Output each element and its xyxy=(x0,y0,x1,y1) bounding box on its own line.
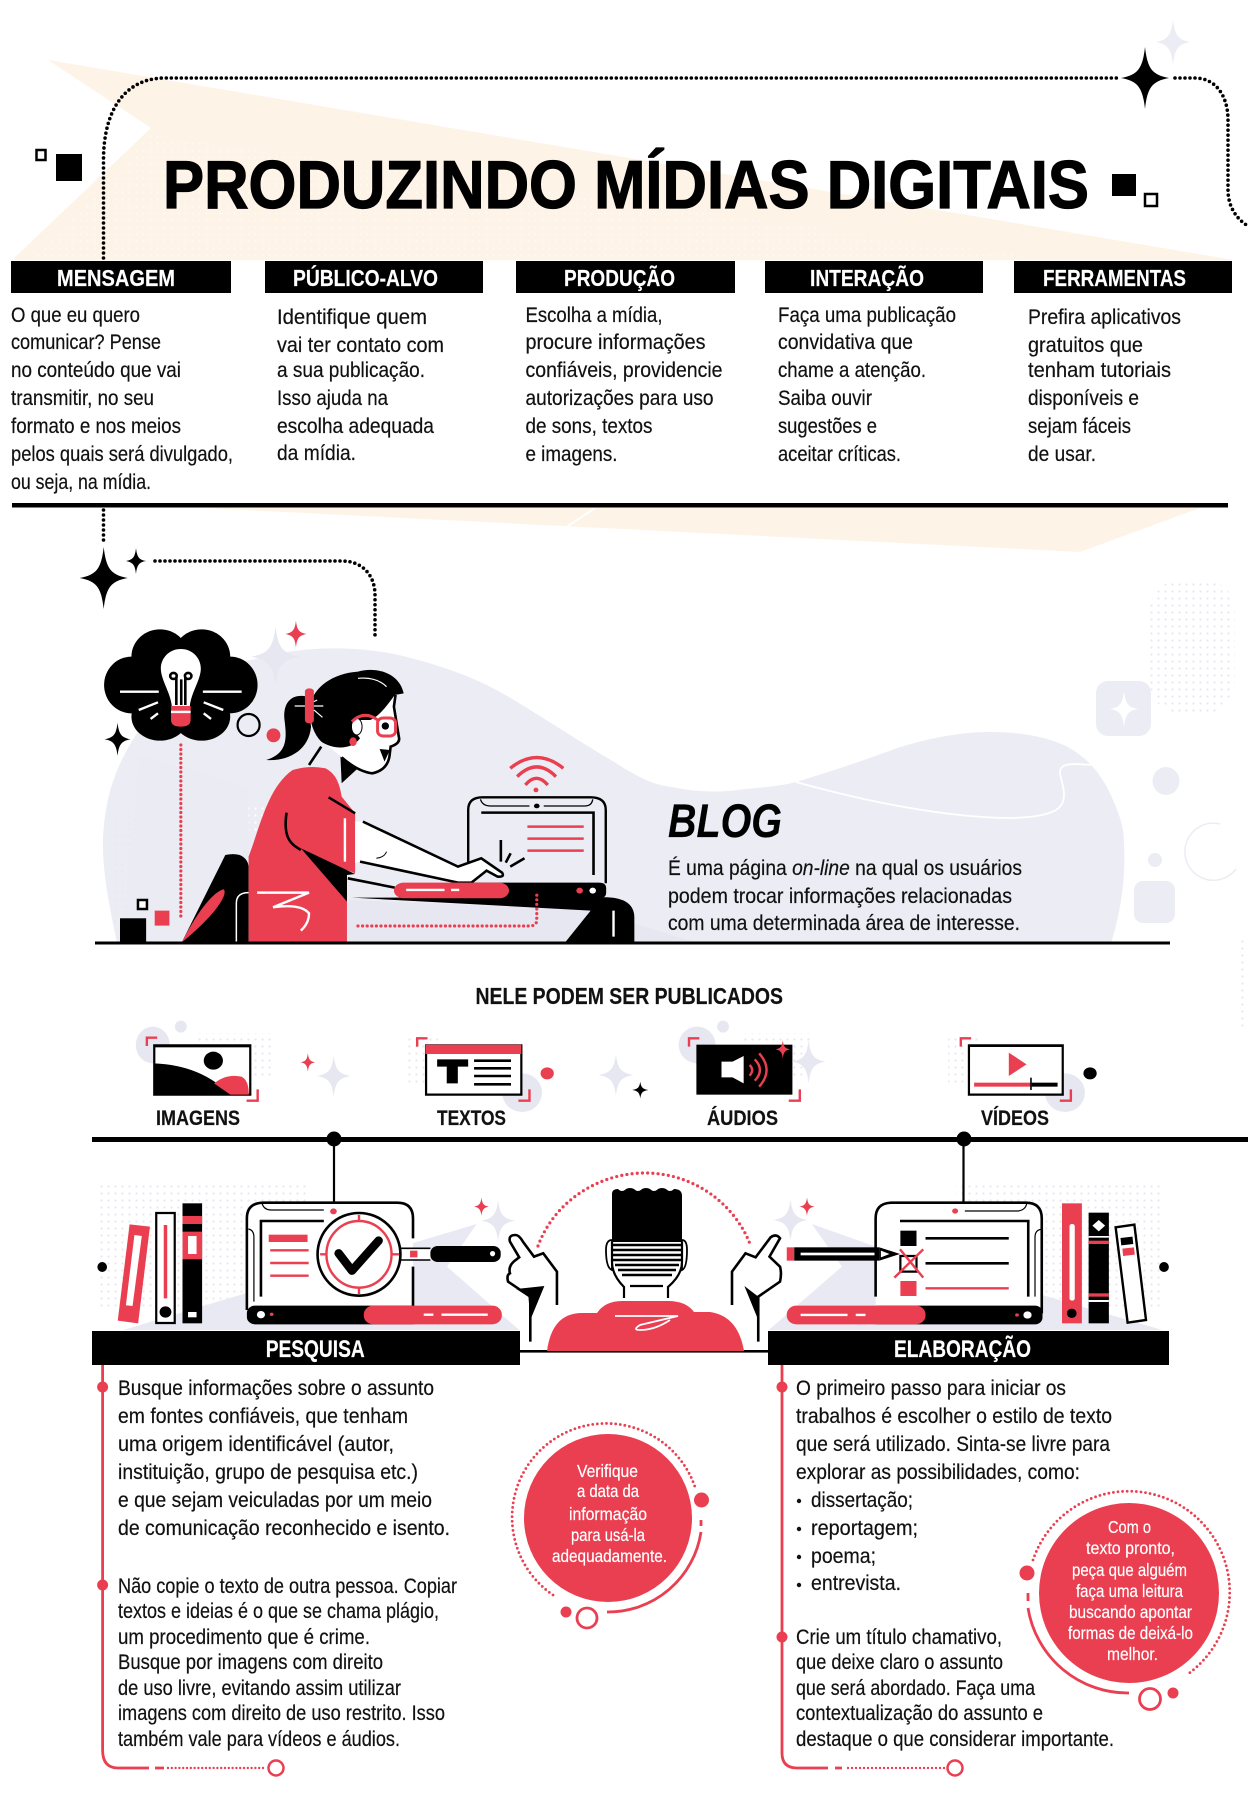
text block: elaboração paragraph 2: contextualização do assunto e xyxy=(796,1701,1043,1725)
illustration: central person xyxy=(520,1188,768,1353)
media labels: TEXTOS xyxy=(437,1107,506,1130)
text block: elaboração paragraph 1: entrevista. xyxy=(811,1571,901,1595)
panel: interação: Saiba ouvir xyxy=(778,386,872,410)
icon: áudios xyxy=(679,1021,826,1101)
callout: verifique: informação xyxy=(569,1504,647,1524)
panel: público-alvo: da mídia. xyxy=(277,441,356,465)
callout: verifique: para usá-la xyxy=(571,1525,645,1545)
heading: nele podem ser publicados: NELE PODEM SER PUBLICADOS xyxy=(476,983,783,1009)
panel: ferramentas: sejam fáceis xyxy=(1028,414,1131,438)
illustration: pesquisa xyxy=(97,1197,557,1342)
blog heading: BLOG xyxy=(668,794,782,847)
dotted connector to blog xyxy=(104,510,375,637)
callout: com o texto pronto xyxy=(1020,1491,1230,1710)
media labels: IMAGENS xyxy=(156,1107,240,1130)
panel: elaboração header xyxy=(768,1331,1169,1365)
panel: mensagem: pelos quais será divulgado, xyxy=(11,442,233,466)
text block: elaboração paragraph 1: poema; xyxy=(811,1544,876,1568)
text block: pesquisa paragraph 2: textos e ideias é o que se chama plágio, xyxy=(118,1599,439,1623)
icon: stars xyxy=(474,1197,515,1241)
text block: pesquisa paragraph 1: e que sejam veiculadas por um meio xyxy=(118,1488,432,1512)
illustration: woman at laptop xyxy=(104,621,697,943)
dot textures behind icons xyxy=(97,1033,1164,1310)
icon: right squares xyxy=(1112,174,1157,206)
panel: ferramentas: disponíveis e xyxy=(1028,386,1139,410)
text block: elaboração paragraph 2: que será abordado. Faça uma xyxy=(796,1676,1035,1700)
icon: stars xyxy=(301,1053,351,1097)
header background shapes xyxy=(12,60,1234,552)
icon: vídeos xyxy=(961,1038,1097,1112)
icon: star near cloud xyxy=(104,723,131,756)
text block: pesquisa paragraph 2: também vale para vídeos e áudios. xyxy=(118,1727,400,1751)
table and laptop xyxy=(352,797,634,943)
callout: com o texto pronto: melhor. xyxy=(1107,1644,1158,1664)
thought bubbles xyxy=(238,714,280,742)
text block: pesquisa paragraph 2: de uso livre, evitando assim utilizar xyxy=(118,1676,401,1700)
timeline line xyxy=(92,1132,1248,1202)
red dotted arc over head xyxy=(538,1173,750,1246)
icon: thought cloud with bulb xyxy=(104,629,258,741)
icon: books xyxy=(118,1203,202,1323)
text block: elaboração paragraph 1: que será utilizado. Sinta-se livre para xyxy=(796,1432,1110,1456)
text block: elaboração paragraph 1: trabalhos é escolher o estilo de texto xyxy=(796,1404,1112,1428)
panel: media icons xyxy=(136,1021,1097,1112)
panel: mensagem: ou seja, na mídia. xyxy=(11,470,151,494)
panel: interação xyxy=(765,261,983,466)
blob dot textures xyxy=(110,803,266,925)
icon: stars xyxy=(598,1054,648,1098)
panel: interação: INTERAÇÃO xyxy=(810,264,924,291)
icon: pointing hand xyxy=(732,1236,781,1342)
panel: produção: Escolha a mídia, xyxy=(526,303,662,327)
illustration: elaboração xyxy=(732,1197,1169,1342)
callout: verifique: adequadamente. xyxy=(552,1546,667,1566)
panel: produção: PRODUÇÃO xyxy=(564,264,675,291)
callout: verifique: a data da xyxy=(577,1481,639,1501)
text block: elaboração paragraph 1: reportagem; xyxy=(811,1516,918,1540)
text block: pesquisa paragraph 2: Busque por imagens com direito xyxy=(118,1650,383,1674)
panel: pesquisa header: PESQUISA xyxy=(266,1336,365,1363)
panel: público-alvo: vai ter contato com xyxy=(277,333,444,357)
panel: produção: e imagens. xyxy=(526,442,618,466)
panel: ferramentas: gratuitos que xyxy=(1028,333,1143,357)
callout: verifique xyxy=(512,1423,709,1628)
panel: ferramentas: de usar. xyxy=(1028,442,1096,466)
blog description: podem trocar informações relacionadas xyxy=(668,884,1012,908)
panel: mensagem: MENSAGEM xyxy=(57,265,175,291)
text block: pesquisa paragraph 1: uma origem identificável (autor, xyxy=(118,1432,394,1456)
icon: books xyxy=(1062,1203,1146,1323)
panel: interação: convidativa que xyxy=(778,330,913,354)
panel: mensagem: comunicar? Pense xyxy=(11,330,161,354)
callout: com o texto pronto: faça uma leitura xyxy=(1076,1581,1183,1601)
text block: elaboração paragraph 1: explorar as possibilidades, como: xyxy=(796,1460,1080,1484)
panel: produção: autorizações para uso xyxy=(526,386,714,410)
panel: interação: Faça uma publicação xyxy=(778,303,956,327)
text block: elaboração paragraph 1: O primeiro passo para iniciar os xyxy=(796,1376,1066,1400)
panel: produção xyxy=(516,261,735,466)
text block: pesquisa paragraph 1: Busque informações sobre o assunto xyxy=(118,1376,434,1400)
panel: ferramentas: tenham tutoriais xyxy=(1028,358,1171,382)
callout: com o texto pronto: peça que alguém xyxy=(1072,1560,1187,1580)
panel: interação: chame a atenção. xyxy=(778,358,926,382)
blog description: É uma página on-line na qual os usuários xyxy=(668,855,1022,880)
panel: produção: procure informações xyxy=(526,330,706,354)
panel: pesquisa header xyxy=(92,1331,520,1365)
icon: laptop with checklist xyxy=(787,1203,1042,1324)
dotted frame line xyxy=(104,78,1248,258)
icon: black stars xyxy=(80,547,146,609)
text block: pesquisa paragraph 1: de comunicação reconhecido e isento. xyxy=(118,1516,450,1540)
callout: com o texto pronto: texto pronto, xyxy=(1086,1538,1175,1558)
panel: público-alvo: PÚBLICO-ALVO xyxy=(293,264,438,291)
media labels xyxy=(156,1107,1049,1130)
text block: pesquisa paragraph 2: Não copie o texto de outra pessoa. Copiar xyxy=(118,1574,457,1598)
text block: elaboração paragraph 1: dissertação; xyxy=(811,1488,913,1512)
arm and hand xyxy=(355,822,525,898)
panel: ferramentas: FERRAMENTAS xyxy=(1043,265,1186,291)
text block: pesquisa paragraph 1 xyxy=(118,1376,450,1540)
title: PRODUZINDO MÍDIAS DIGITAIS xyxy=(163,147,1089,223)
icon: pencil xyxy=(787,1247,900,1261)
panel: produção: confiáveis, providencie xyxy=(526,358,722,382)
blog description xyxy=(668,855,1022,935)
panel: mensagem: formato e nos meios xyxy=(11,414,181,438)
panel: público-alvo xyxy=(265,261,483,465)
panel: mensagem: transmitir, no seu xyxy=(11,386,154,410)
chair xyxy=(182,854,249,943)
panel: público-alvo: Isso ajuda na xyxy=(277,386,388,410)
icon: laptop with magnifier xyxy=(247,1203,502,1324)
text block: elaboração paragraph 2 xyxy=(796,1625,1114,1751)
blog description: com uma determinada área de interesse. xyxy=(668,911,1020,935)
icon: left squares xyxy=(36,150,82,181)
blog background blob xyxy=(103,648,1124,943)
text block: pesquisa paragraph 2: um procedimento que é crime. xyxy=(118,1625,370,1649)
panel: ferramentas: Prefira aplicativos xyxy=(1028,305,1181,329)
icon: header stars xyxy=(1121,19,1190,109)
icon: wifi xyxy=(510,757,563,792)
body xyxy=(249,767,395,943)
callout: com o texto pronto: Com o xyxy=(1108,1517,1151,1537)
text block: pesquisa paragraph 1: em fontes confiáveis, que tenham xyxy=(118,1404,408,1428)
pesquisa timeline xyxy=(97,1365,283,1776)
head xyxy=(266,670,404,783)
callout: verifique: Verifique xyxy=(577,1461,638,1481)
callout: com o texto pronto: formas de deixá-lo xyxy=(1068,1623,1193,1643)
icon: pointing hand xyxy=(507,1235,557,1342)
panel: mensagem: O que eu quero xyxy=(11,303,140,327)
panel: mensagem xyxy=(11,261,233,494)
icon: imagens xyxy=(136,1021,258,1101)
blob white curve xyxy=(796,764,1095,818)
panel: mensagem: no conteúdo que vai xyxy=(11,358,181,382)
text block: pesquisa paragraph 1: instituição, grupo de pesquisa etc.) xyxy=(118,1460,418,1484)
panel: interação: sugestões e xyxy=(778,414,877,438)
panel: elaboração header: ELABORAÇÃO xyxy=(894,1335,1031,1363)
icon: textos xyxy=(417,1038,554,1112)
panel: produção: de sons, textos xyxy=(526,414,652,438)
text block: pesquisa paragraph 2 xyxy=(118,1574,457,1751)
media labels: ÁUDIOS xyxy=(707,1107,778,1130)
text block: elaboração paragraph 2: destaque o que considerar importante. xyxy=(796,1727,1114,1751)
text block: elaboração paragraph 2: que deixe claro o assunto xyxy=(796,1650,1003,1674)
text block: pesquisa paragraph 2: imagens com direito de uso restrito. Isso xyxy=(118,1701,445,1725)
panel: público-alvo: a sua publicação. xyxy=(277,358,425,382)
panel: ferramentas xyxy=(1014,261,1232,466)
icon: stars xyxy=(773,1197,815,1241)
elaboração timeline xyxy=(776,1365,962,1776)
callout: com o texto pronto: buscando apontar xyxy=(1069,1602,1192,1622)
panel: público-alvo: escolha adequada xyxy=(277,414,434,438)
panel: interação: aceitar críticas. xyxy=(778,442,901,466)
desk squares xyxy=(120,900,169,943)
media labels: VÍDEOS xyxy=(981,1107,1049,1130)
text block: elaboração paragraph 2: Crie um título chamativo, xyxy=(796,1625,1002,1649)
text block: elaboração paragraph 1 xyxy=(796,1376,1112,1595)
right decorative shapes xyxy=(1096,580,1248,1030)
panel: público-alvo: Identifique quem xyxy=(277,305,427,329)
